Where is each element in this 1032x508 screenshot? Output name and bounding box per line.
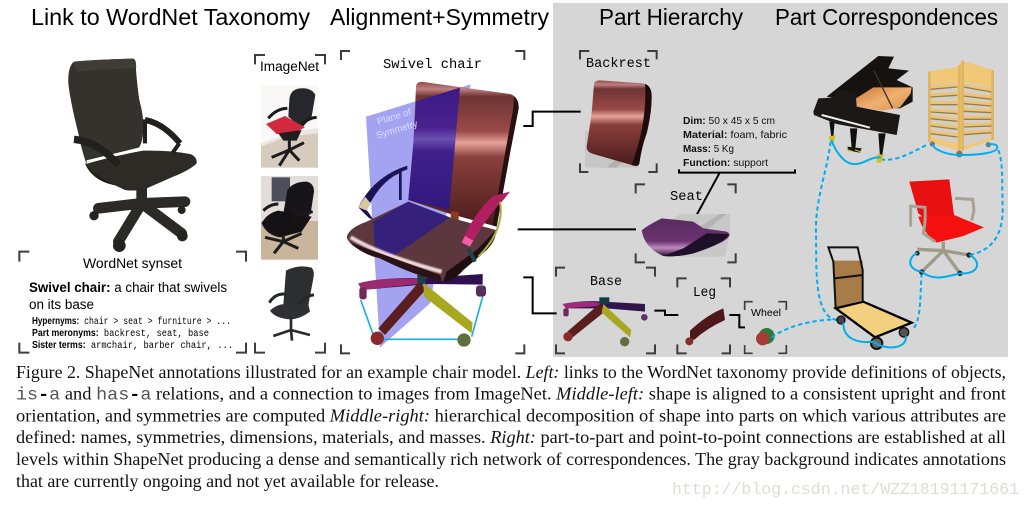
bracket: Leg [677, 278, 730, 353]
connector lines from chair to parts [518, 112, 636, 313]
text: hypernyms, meronyms, sister terms: Part meronyms: backrest, seat, base [32, 328, 209, 340]
attributes: dim, material, mass, function: Mass: 5 Kg [683, 143, 734, 155]
bracket: Seat [636, 184, 736, 262]
backrest [408, 82, 519, 227]
black swivel chair model [68, 59, 197, 252]
part: base [563, 297, 648, 346]
title: Part Correspondences: Part Correspondences [775, 4, 998, 30]
part: leg [685, 308, 725, 345]
caption: orientation, and symmetries are computed Middle-right: hierarchical decomposition of shape into parts on which various attributes are [16, 406, 1006, 426]
label: ImageNet: ImageNet [260, 59, 319, 74]
panel: gray background for ongoing annotations [553, 3, 1008, 357]
label: Wheel: Wheel [751, 307, 781, 319]
correspondence network: solid point loops [832, 141, 997, 347]
watermark: http://blog.csdn.net/WZZ18191171661 [672, 481, 1019, 500]
red office chair [909, 179, 984, 276]
part: backrest [585, 80, 652, 168]
caption: defined: names, symmetries, dimensions, materials, and masses. Right: part-to-part and point-to-point connections are established at all [16, 427, 1006, 447]
label: Seat: Seat [670, 190, 703, 205]
caption: Figure 2. ShapeNet annotations illustrated for an example chair model. Left: links to the WordNet taxonomy provide definitions of objects, [16, 362, 1006, 382]
photo: leather chair on white [269, 266, 314, 341]
label: Swivel chair: Swivel chair [383, 58, 482, 73]
bracket: WordNet synset [19, 252, 246, 353]
right arm [462, 192, 510, 247]
left arm [358, 166, 407, 219]
title: Alignment+Symmetry: Alignment+Symmetry [330, 4, 549, 30]
label: Backrest: Backrest [586, 57, 651, 72]
caption: that are currently ongoing and not yet available for release. [16, 471, 439, 491]
correspondence network: dashed part links [772, 142, 1003, 337]
bracket: ImageNet [255, 55, 325, 353]
label: Plane of Symmetry [371, 106, 419, 141]
hand trolley [828, 247, 912, 349]
title: Link to WordNet Taxonomy: Link to WordNet Taxonomy [31, 4, 311, 30]
label: Plane of Symmetry: Plane of [376, 107, 413, 128]
attributes: dim, material, mass, function: Function: support [683, 157, 768, 169]
photo: black chair on wood floor [261, 176, 318, 260]
caption: levels within ShapeNet producing a dense and semantically rich network of correspondences. The gray background indicates annotations [16, 449, 1006, 469]
plane of symmetry [366, 84, 471, 347]
text: hypernyms, meronyms, sister terms: Hypernyms: chair > seat > furniture > ... [32, 316, 231, 328]
text: hypernyms, meronyms, sister terms [32, 316, 233, 352]
text: Swivel chair definition: Swivel chair: a chair that swivels [29, 280, 227, 295]
caption [16, 362, 1006, 491]
seat [347, 202, 496, 282]
label: Plane of Symmetry: Symmetry [375, 118, 419, 141]
bracket: Swivel chair aligned view [341, 51, 524, 353]
piano [813, 56, 913, 162]
attributes: dim, material, mass, function: Dim: 50 x 45 x 5 cm [683, 115, 775, 127]
caption: is-a and has-a relations, and a connection to images from ImageNet. Middle-left: shape is aligned to a consistent upright and front [16, 384, 1006, 406]
aligned chair with plane of symmetry [347, 82, 519, 347]
attributes: dim, material, mass, function [683, 115, 787, 169]
text: hypernyms, meronyms, sister terms: Sister terms: armchair, barber chair, ... [32, 340, 233, 352]
blue symmetry lines [361, 297, 483, 339]
label: WordNet synset: WordNet synset [83, 255, 182, 271]
chair base [358, 274, 483, 290]
text: Swivel chair definition: on its base [29, 297, 94, 312]
bracket: Base [556, 268, 655, 353]
photo: chair with red cushion [261, 85, 318, 168]
part: seat [642, 214, 730, 257]
attributes: dim, material, mass, function: Material: foam, fabric [683, 129, 787, 141]
text: Swivel chair definition [29, 280, 227, 312]
connector base to leg to wheel [654, 311, 745, 327]
title: Part Hierarchy: Part Hierarchy [599, 4, 743, 30]
bracket: Wheel [745, 302, 786, 353]
label: Leg: Leg [693, 285, 716, 301]
wooden screen [928, 61, 993, 157]
label: Base: Base [590, 275, 622, 290]
bracket: Backrest [580, 51, 657, 172]
part: wheel [756, 328, 775, 345]
brace and pointer to seat [679, 169, 795, 215]
